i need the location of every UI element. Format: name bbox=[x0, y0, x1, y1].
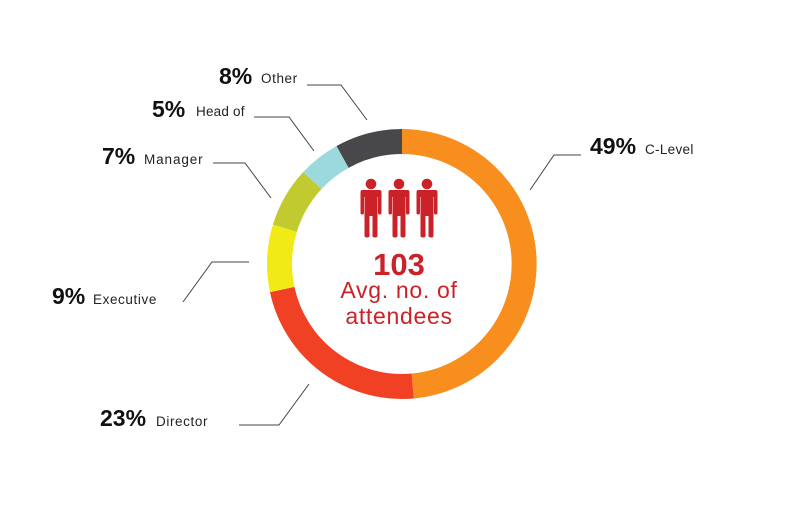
icon: person 2 bbox=[388, 179, 410, 238]
donut chart bbox=[280, 142, 524, 386]
callout: Head of bbox=[152, 96, 314, 151]
callout: Manager: Manager bbox=[144, 152, 204, 167]
segment: Executive bbox=[280, 228, 285, 290]
segment: Manager bbox=[285, 180, 312, 228]
callout: Other bbox=[219, 63, 367, 120]
callout: Head of: 5% bbox=[152, 96, 185, 122]
center number: 103 bbox=[373, 247, 425, 282]
icon: person 3 bbox=[416, 179, 438, 238]
callout: Director: 23% bbox=[100, 405, 146, 431]
callout: C-Level: 49% bbox=[590, 133, 636, 159]
segment: Director bbox=[282, 290, 413, 386]
callout: Other: 8% bbox=[219, 63, 252, 89]
callout: Director bbox=[100, 384, 309, 431]
segment: Head of bbox=[312, 157, 343, 180]
center caption: Avg. no. of bbox=[340, 277, 458, 303]
icon: three attendees bbox=[360, 179, 438, 238]
segment: C-Level bbox=[402, 142, 524, 386]
callout: C-Level bbox=[530, 133, 694, 190]
icon: person 1 bbox=[360, 179, 382, 238]
callout: Manager: 7% bbox=[102, 143, 135, 169]
segment: Other bbox=[343, 142, 402, 157]
callout: C-Level: C-Level bbox=[645, 142, 694, 157]
center caption: attendees bbox=[345, 303, 453, 329]
callout: Director: Director bbox=[156, 414, 208, 429]
callout: Other: Other bbox=[261, 71, 298, 86]
callout: Manager bbox=[102, 143, 271, 198]
callout: Head of: Head of bbox=[196, 104, 245, 119]
callout: Executive: 9% bbox=[52, 283, 85, 309]
callout: Executive bbox=[52, 262, 249, 309]
callout: Executive: Executive bbox=[93, 292, 157, 307]
